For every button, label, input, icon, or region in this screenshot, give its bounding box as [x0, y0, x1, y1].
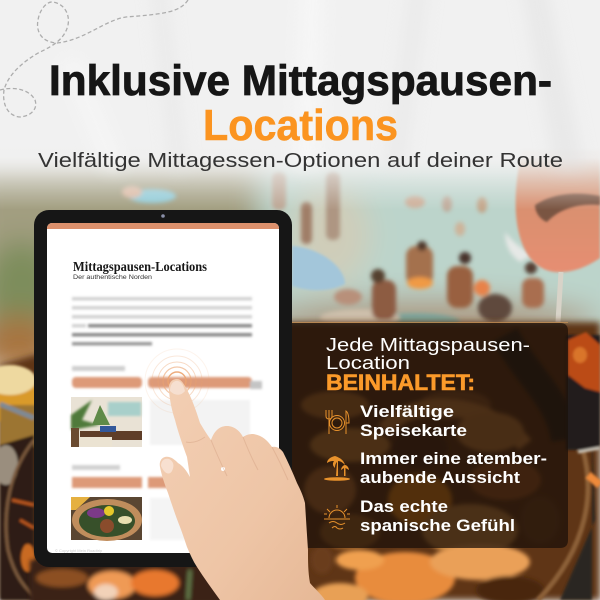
document subtitle: Der authentische Norden — [73, 274, 152, 281]
title line 1: Inklusive Mittagspausen- — [49, 57, 552, 105]
panel heading: Jede Mittagspausen- — [326, 334, 530, 355]
copyright note: © Copyright Mein Roadtrip — [55, 548, 103, 553]
tablet-bottom shrimps — [30, 560, 225, 600]
blurred section one — [72, 366, 262, 445]
panel heading — [326, 334, 530, 373]
title line 2: Locations — [203, 101, 398, 150]
list item 3: Das echte — [360, 498, 448, 516]
right: shrimps, rice and pan rim — [301, 335, 565, 556]
list item 3 — [360, 498, 515, 535]
list item 2: aubende Aussicht — [360, 469, 521, 487]
list item 1: Vielfältige — [360, 403, 454, 421]
dashed route decoration — [0, 0, 188, 117]
panel heading: Location — [326, 352, 410, 373]
fingernail: thumb — [161, 459, 173, 473]
right: black pot with red food — [566, 332, 600, 485]
wine glass — [516, 150, 600, 322]
icon: palm island — [324, 456, 350, 481]
blurred paragraph — [72, 297, 252, 346]
list item 2 — [360, 450, 547, 487]
icon: sunset over water — [324, 505, 350, 529]
list item 1: Speisekarte — [360, 422, 467, 440]
list item 1 — [360, 403, 467, 440]
tablet camera — [161, 214, 165, 218]
document title: Mittagspausen-Locations — [73, 259, 207, 274]
paper fade over the beach photo — [0, 0, 600, 210]
background photo: paella pan and food — [0, 322, 600, 600]
tablet screen — [47, 223, 279, 553]
fingernail: index finger — [170, 381, 185, 395]
touch ripple rings — [145, 349, 209, 413]
hand pointing at the tablet — [160, 379, 325, 600]
left: lemon and steel pan handle — [0, 365, 40, 600]
blurred section two — [70, 464, 184, 539]
screen top band — [47, 223, 279, 229]
icon: plate and cutlery — [326, 410, 349, 434]
list item 2: Immer eine atember- — [360, 450, 547, 468]
photo: food bowl — [71, 497, 142, 541]
photo: restaurant terrace — [71, 397, 142, 447]
finger gap showing the screen — [221, 467, 225, 471]
panel highlight word: BEINHALTET: — [326, 370, 475, 395]
bottom right shrimps and pan rim — [311, 544, 544, 600]
background: crumpled paper creases — [60, 0, 585, 170]
tablet mockup — [34, 210, 292, 567]
background photo: beach with bathers — [0, 165, 600, 375]
subtitle: Vielfältige Mittagessen-Optionen auf deiner Route — [38, 150, 563, 172]
tablet body — [34, 210, 292, 567]
finger creases — [186, 437, 288, 480]
panel: what every location includes — [286, 322, 568, 548]
list item 3: spanische Gefühl — [360, 517, 515, 535]
